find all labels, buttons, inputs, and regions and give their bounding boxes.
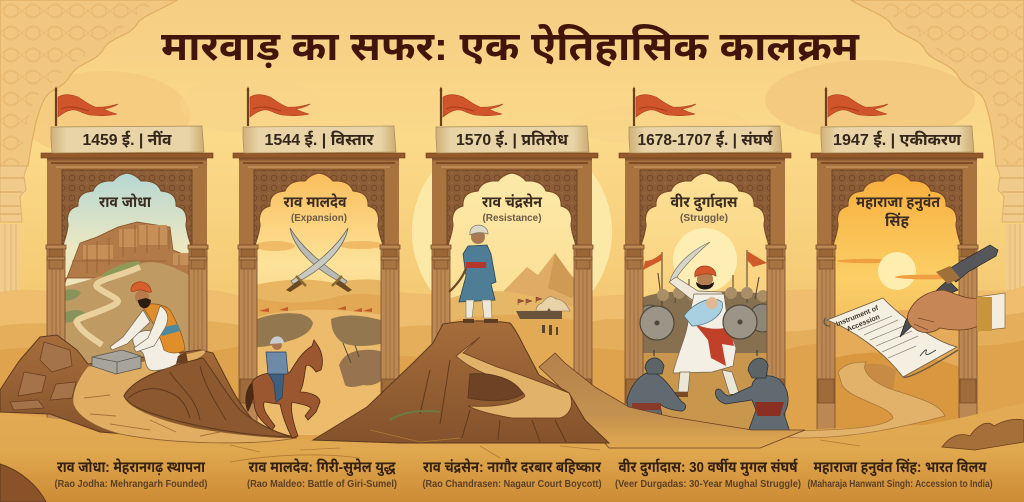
caption: Rao Chandrasen (422, 458, 602, 490)
heading: Rao Chandrasen: (Resistance) (482, 213, 542, 224)
archway frame (811, 153, 983, 435)
date plaque (436, 126, 589, 153)
scene: Mughal army (642, 174, 768, 429)
caption: Rao Maldeo: (Rao Maldeo: Battle of Giri-Sumel) (247, 478, 397, 490)
instrument of accession document (824, 298, 958, 377)
caption: Maharaja Hanwant Singh (808, 458, 992, 490)
flag (440, 86, 503, 126)
caption: Rao Jodha (54, 458, 208, 490)
heading: Rao Chandrasen (482, 193, 543, 224)
instrument of accession document: Instrument of (835, 305, 880, 328)
heading: Rao Chandrasen: राव चंद्रसेन (482, 193, 543, 211)
caption: Veer Durgadas: वीर दुर्गादास: 30 वर्षीय मुगल संघर्ष (618, 458, 798, 477)
date plaque: 1544 ई. | विस्तार (264, 130, 374, 149)
caption: Maharaja Hanwant Singh: महाराजा हनुवंत सिंह: भारत विलय (814, 458, 987, 477)
panel: 1947 Maharaja Hanwant Singh (811, 86, 983, 435)
caption: Veer Durgadas (615, 458, 801, 490)
caption: Rao Maldeo (247, 458, 397, 490)
date plaque (51, 126, 204, 153)
hand with pen-pistol signing (900, 245, 1005, 337)
caption: Rao Jodha: राव जोधा: मेहरानगढ़ स्थापना (57, 458, 206, 476)
caption: Rao Jodha: (Rao Jodha: Mehrangarh Founded) (54, 478, 208, 490)
sand cracks (230, 430, 860, 462)
scene: mountains and Nagaur camp (449, 227, 575, 335)
archway frame (426, 153, 598, 435)
date plaque (821, 126, 974, 153)
caption: Rao Maldeo: राव मालदेव: गिरी-सुमेल युद्ध (248, 458, 396, 477)
flag (825, 86, 888, 126)
figure: Rao Chandrasen standing on hill (449, 225, 498, 323)
title: मारवाड़ का सफर: एक ऐतिहासिक कालक्रम (161, 24, 860, 69)
archway frame (619, 153, 791, 435)
corner ornament: top right arch and column (851, 0, 1024, 324)
scene: Mehrangarh fort sky and hill (64, 174, 190, 364)
figure: Veer Durgadas with sword and infant (640, 242, 757, 400)
heading: Maharaja Hanwant Singh: सिंह (885, 212, 909, 230)
figure: Mughal soldier right (715, 350, 790, 432)
winding road right, gate five (759, 362, 945, 438)
shields (640, 305, 757, 340)
terrain: second ridge (539, 353, 805, 448)
caption: Rao Chandrasen: राव चंद्रसेन: नागौर दरबार बहिष्कार (423, 458, 601, 476)
flag (247, 86, 310, 126)
panel: 1678-1707 Veer Durgadas (619, 86, 791, 435)
heading: Rao Maldeo: (Expansion) (291, 213, 347, 224)
heading: Veer Durgadas: वीर दुर्गादास (670, 193, 738, 212)
bottom right rocks (942, 419, 1024, 450)
date plaque: 1678-1707 ई. | संघर्ष (638, 130, 773, 149)
decorative clouds and sun halo (20, 60, 975, 332)
heading: Maharaja Hanwant Singh (856, 194, 941, 230)
figure: Mughal soldier left (627, 350, 686, 416)
terrain: central hill with zig-zag path (313, 321, 609, 443)
date plaque (243, 126, 396, 153)
caption: Veer Durgadas: (Veer Durgadas: 30-Year Mughal Struggle) (615, 478, 801, 490)
flag (633, 86, 696, 126)
figure: Rao Jodha placing foundation stone (92, 282, 188, 374)
heading: Veer Durgadas (670, 193, 738, 224)
date plaque: 1459 ई. | नींव (82, 130, 172, 149)
archway frame (41, 153, 213, 435)
heading: Veer Durgadas: (Struggle) (680, 213, 728, 224)
terrain: left hill with cliff and road (0, 335, 297, 443)
caption: Rao Chandrasen: (Rao Chandrasen: Nagaur Court Boycott) (422, 478, 602, 490)
instrument of accession document: Accession (846, 314, 881, 333)
foreground sand (0, 412, 1024, 502)
panel: 1544 Rao Maldeo (233, 86, 405, 435)
background dunes (0, 286, 1024, 502)
date plaque: 1570 ई. | प्रतिरोध (456, 130, 569, 149)
date plaque: 1947 ई. | एकीकरण (833, 130, 962, 149)
bottom left dune edge (0, 464, 46, 502)
heading: Rao Maldeo (284, 193, 347, 224)
corner ornament: top left arch and column (0, 0, 177, 324)
scene: sunset (834, 174, 960, 428)
archway frame (233, 153, 405, 435)
panel: 1459 Rao Jodha (41, 86, 213, 435)
heading: Rao Maldeo: राव मालदेव (284, 193, 347, 211)
heading: Rao Jodha: राव जोधा (99, 194, 152, 211)
heading: Maharaja Hanwant Singh: महाराजा हनुवंत (856, 194, 941, 212)
icon: crossed swords (286, 228, 352, 292)
scene: desert sky and armies (256, 174, 382, 435)
flag (55, 86, 118, 126)
figure: Rao Maldeo on horseback (245, 336, 322, 438)
right foreground dune (790, 403, 1024, 502)
panel: 1570 Rao Chandrasen (426, 86, 598, 384)
date plaque (629, 126, 782, 153)
